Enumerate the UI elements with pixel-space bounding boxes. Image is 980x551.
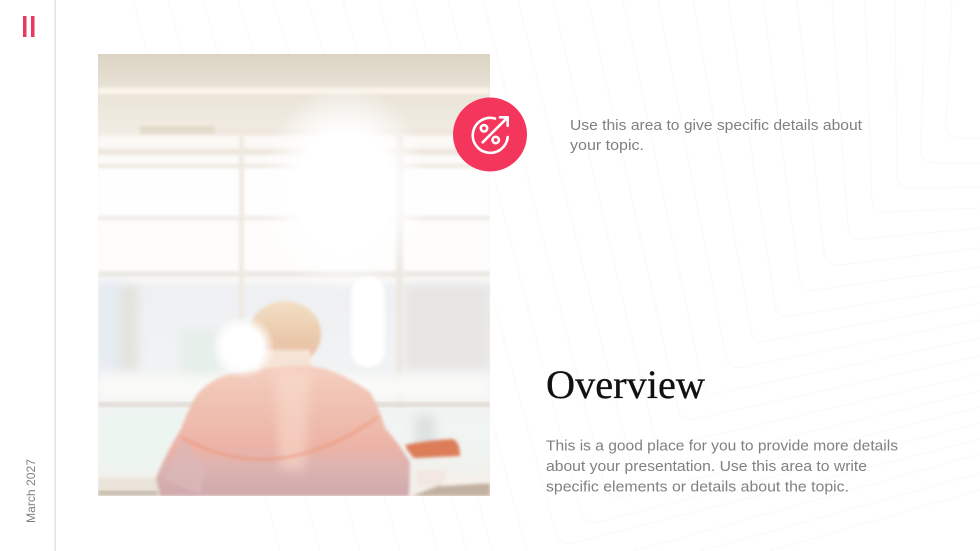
text block: overview body: about your presentation. Use this area to write (546, 458, 867, 475)
text block: top detail (570, 117, 863, 154)
heading: Overview (546, 362, 705, 407)
handrail (98, 402, 490, 407)
text block: overview body: specific elements or details about the topic. (546, 478, 849, 496)
desk (98, 478, 158, 491)
red chair (405, 439, 460, 458)
text block: overview body: This is a good place for you to provide more details (546, 438, 898, 454)
lens flare spot (216, 318, 274, 378)
window panes in the lower background (102, 280, 490, 442)
lens flare arc (181, 417, 378, 459)
icon: red pause-style logo bars (23, 16, 34, 37)
text block: top detail: your topic. (570, 137, 644, 154)
man: shirt (156, 366, 410, 496)
icon: red circle with percent and growth arrow (453, 98, 527, 172)
date label: March 2027 (24, 459, 38, 523)
glare on window (276, 96, 414, 276)
cup and papers (412, 470, 490, 496)
man: head and neck (249, 301, 321, 375)
text block: top detail: Use this area to give specific details about (570, 117, 863, 134)
left sidebar divider (54, 0, 56, 551)
photo: man at desk in sunlit office (98, 54, 490, 496)
text block: overview body (546, 438, 898, 496)
